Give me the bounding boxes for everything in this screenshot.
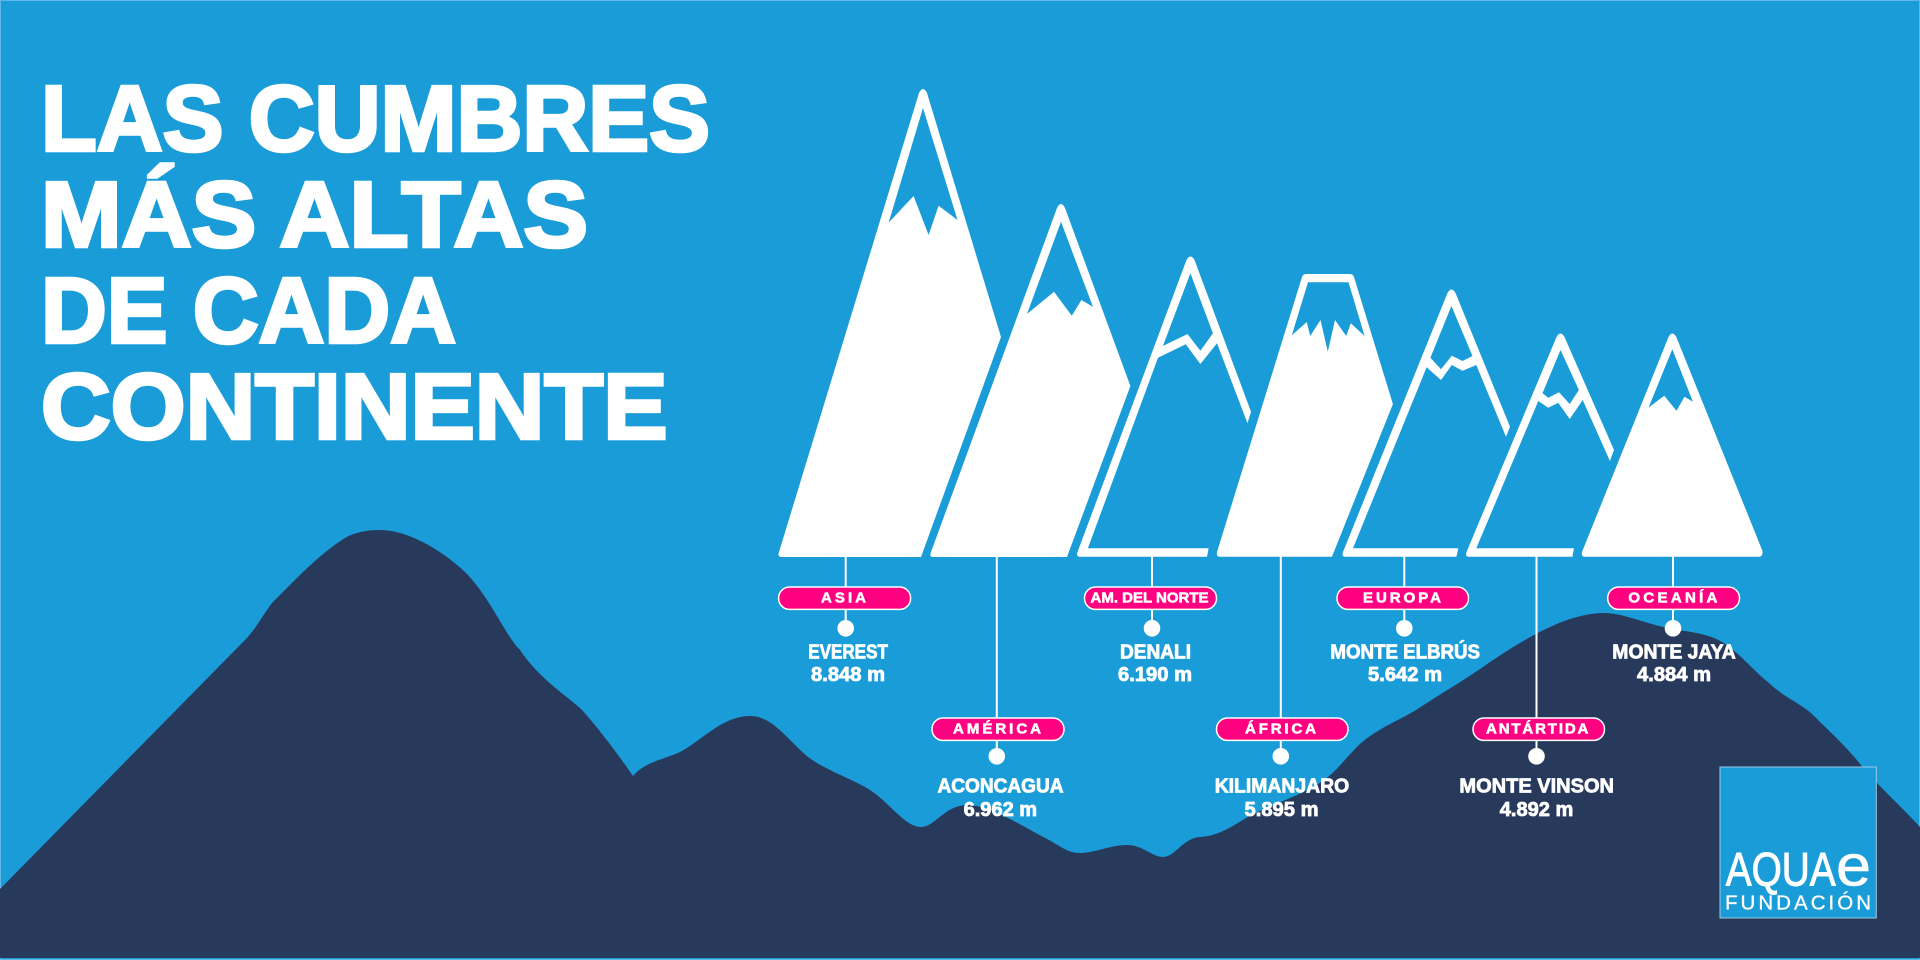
logo: Aquae Fundación: FUNDACIÓN [1725,891,1871,914]
label: Antártida Monte Vinson [1459,556,1614,821]
mountain icon: Aconcagua [930,204,1130,557]
label: África Kilimanjaro: 5.895 m [1244,799,1318,821]
label: Am. del Norte Denali: 6.190 m [1118,664,1192,686]
label: Am. del Norte Denali [1084,556,1216,686]
logo: Aquae Fundación: e [1836,834,1871,898]
label: Europa Monte Elbrús: 5.642 m [1368,664,1442,686]
label: América Aconcagua: AMÉRICA [953,720,1041,738]
mountain icon: Monte Elbrús [1343,290,1510,557]
label: África Kilimanjaro: ÁFRICA [1245,720,1316,738]
label: Europa Monte Elbrús: EUROPA [1363,590,1441,606]
label: Antártida Monte Vinson: MONTE VINSON [1459,776,1614,798]
title: CONTINENTE [41,354,668,458]
label: América Aconcagua: ACONCAGUA [938,776,1064,798]
label: Oceanía Monte Jaya: 4.884 m [1637,664,1711,686]
label: Asia Everest: ASIA [821,590,866,606]
mountain icon: Monte Jaya [1582,334,1763,557]
label: Antártida Monte Vinson: 4.892 m [1500,799,1573,821]
title [41,66,710,458]
label: África Kilimanjaro [1215,556,1349,821]
title: DE CADA [41,258,456,362]
label: Oceanía Monte Jaya [1608,556,1740,686]
label: Am. del Norte Denali: DENALI [1120,641,1191,663]
label: Asia Everest: EVEREST [808,641,888,663]
label: Antártida Monte Vinson: ANTÁRTIDA [1486,720,1589,738]
label: Oceanía Monte Jaya: MONTE JAYA [1612,641,1736,663]
mountain icon: Monte Vinson [1466,334,1614,557]
label: Am. del Norte Denali: AM. DEL NORTE [1090,590,1208,606]
mountain icon: Kilimanjaro [1217,274,1393,557]
logo: Aquae Fundación: AQUA [1726,842,1836,896]
title: MÁS ALTAS [41,162,588,266]
mountain icon: Denali [1077,256,1251,557]
label: América Aconcagua: 6.962 m [964,799,1037,821]
label: Europa Monte Elbrús: MONTE ELBRÚS [1330,639,1480,663]
title: LAS CUMBRES [41,66,710,170]
background mountain range silhouette [0,530,1920,958]
mountain icon: Everest [778,89,1001,557]
logo: Aquae Fundación [1720,767,1876,918]
label: Oceanía Monte Jaya: OCEANÍA [1628,590,1718,606]
label: Asia Everest: 8.848 m [811,664,885,686]
label: Europa Monte Elbrús [1330,556,1480,686]
label: África Kilimanjaro: KILIMANJARO [1215,776,1349,798]
label: Asia Everest [779,556,911,686]
label: América Aconcagua [932,556,1064,821]
